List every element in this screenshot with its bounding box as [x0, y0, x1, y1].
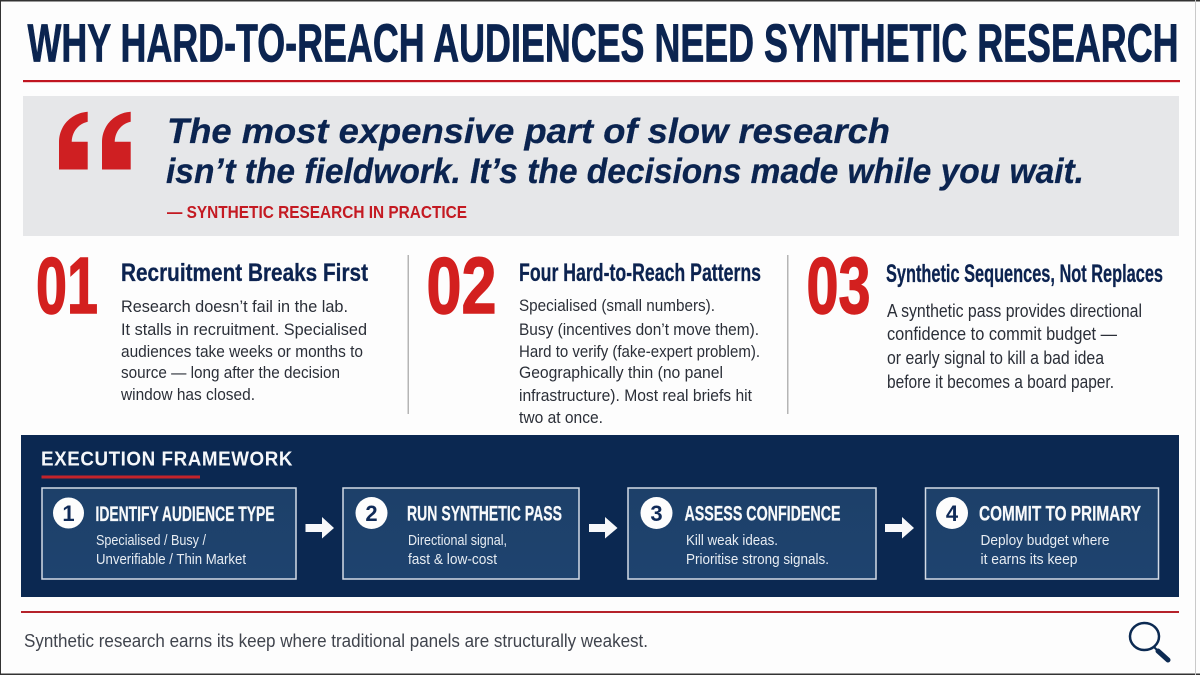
step 1 text: Specialised / Busy /: [96, 532, 207, 549]
step 1 badge: 1: [62, 501, 75, 526]
step 4 text: [980, 532, 1110, 568]
body 01: Research doesn’t fail in the lab.: [121, 297, 348, 316]
step 4 badge: [936, 497, 968, 529]
body 01: source — long after the decision: [121, 363, 340, 382]
panel: quote: [23, 96, 1179, 236]
step 3 badge: 3: [650, 501, 663, 526]
panel: execution framework: [21, 435, 1179, 597]
body 03: confidence to commit budget —: [887, 324, 1117, 344]
step 2 badge: 2: [365, 501, 378, 526]
column 03: synthetic sequences, not replaces: [806, 241, 1163, 392]
step 3 text: Kill weak ideas.: [686, 532, 778, 549]
body 02: Hard to verify (fake-expert problem).: [519, 342, 760, 361]
number 02: 02: [426, 241, 496, 330]
body 03: [887, 301, 1142, 392]
step 3: [628, 488, 876, 579]
body 01: audiences take weeks or months to: [121, 342, 363, 361]
step 4 text: it earns its keep: [980, 551, 1078, 568]
icon: quotation marks: [59, 112, 131, 170]
step 1 text: Unverifiable / Thin Market: [96, 551, 247, 568]
body 02: Geographically thin (no panel: [519, 363, 723, 382]
column 02: four hard-to-reach patterns: [426, 241, 761, 427]
body 02: two at once.: [519, 408, 603, 427]
body 02: Specialised (small numbers).: [519, 296, 715, 315]
body 01: It stalls in recruitment. Specialised: [121, 320, 367, 339]
icon: magnifying glass: [1130, 623, 1168, 660]
number 03: 03: [806, 241, 870, 330]
body 01: [120, 297, 367, 404]
step 2 badge: [356, 497, 388, 529]
heading 01: Recruitment Breaks First: [121, 259, 369, 287]
arrow 3: [885, 517, 914, 538]
step 4 title: COMMIT TO PRIMARY: [979, 502, 1141, 526]
step 1 badge: [53, 498, 84, 528]
step 3 text: [686, 532, 829, 568]
number 01: 01: [36, 241, 98, 330]
step 2 text: fast & low-cost: [408, 551, 498, 568]
body 03: A synthetic pass provides directional: [887, 301, 1142, 321]
quote text: [166, 111, 1084, 191]
body 02: [519, 296, 760, 427]
step 4 badge: 4: [946, 501, 959, 526]
body 03: before it becomes a board paper.: [887, 372, 1114, 392]
step 4: [926, 488, 1158, 579]
body 02: Busy (incentives don’t move them).: [519, 320, 759, 339]
step 2 text: [408, 532, 507, 568]
body 02: infrastructure). Most real briefs hit: [519, 386, 752, 405]
quote attribution: — SYNTHETIC RESEARCH IN PRACTICE: [167, 202, 467, 222]
framework heading: EXECUTION FRAMEWORK: [41, 448, 293, 470]
quote text: The most expensive part of slow research: [167, 111, 890, 151]
step 4 text: Deploy budget where: [980, 532, 1110, 549]
footer text: Synthetic research earns its keep where traditional panels are structurally weakest.: [24, 630, 648, 651]
arrow 1: [306, 517, 334, 538]
arrow 2: [589, 517, 618, 538]
heading 02: Four Hard-to-Reach Patterns: [519, 259, 761, 287]
step 1 title: IDENTIFY AUDIENCE TYPE: [96, 503, 274, 526]
step 3 text: Prioritise strong signals.: [686, 551, 829, 568]
step 2 title: RUN SYNTHETIC PASS: [407, 502, 562, 526]
column 01: recruitment breaks first: [36, 241, 369, 404]
body 03: or early signal to kill a bad idea: [887, 348, 1105, 368]
step 2 text: Directional signal,: [408, 532, 507, 549]
step 1: [42, 488, 296, 579]
step 2: [343, 488, 579, 579]
step 3 title: ASSESS CONFIDENCE: [684, 502, 840, 526]
quote text: isn’t the fieldwork. It’s the decisions made while you wait.: [166, 151, 1084, 191]
step 1 text: [96, 532, 247, 568]
body 01: window has closed.: [120, 385, 255, 404]
step 3 badge: [640, 497, 672, 529]
